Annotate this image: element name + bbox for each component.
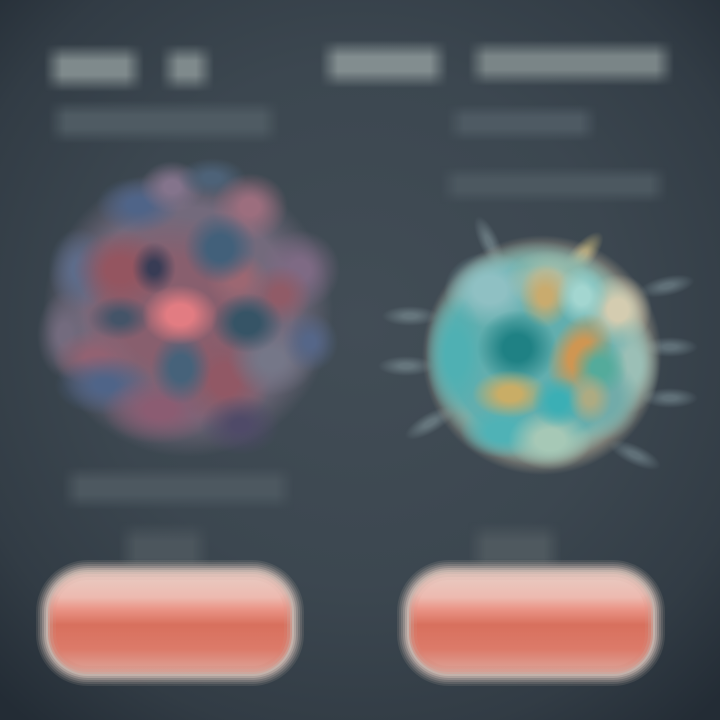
subtitle right [450,109,661,198]
subtitle left [54,105,272,140]
caption under left molecule [69,472,284,504]
left pill button [36,560,304,686]
halo [422,235,662,475]
heading right [322,42,672,86]
right rays around sphere [382,220,694,468]
right cell: teal and orange sphere [424,236,660,474]
sphere body [43,167,333,457]
left molecule: red and blue network sphere [40,161,336,450]
label above left pill [126,530,201,564]
heading left [46,46,212,90]
red core [142,285,218,345]
right pill button [397,560,665,686]
sphere body [425,241,649,465]
label above right pill [476,530,555,564]
